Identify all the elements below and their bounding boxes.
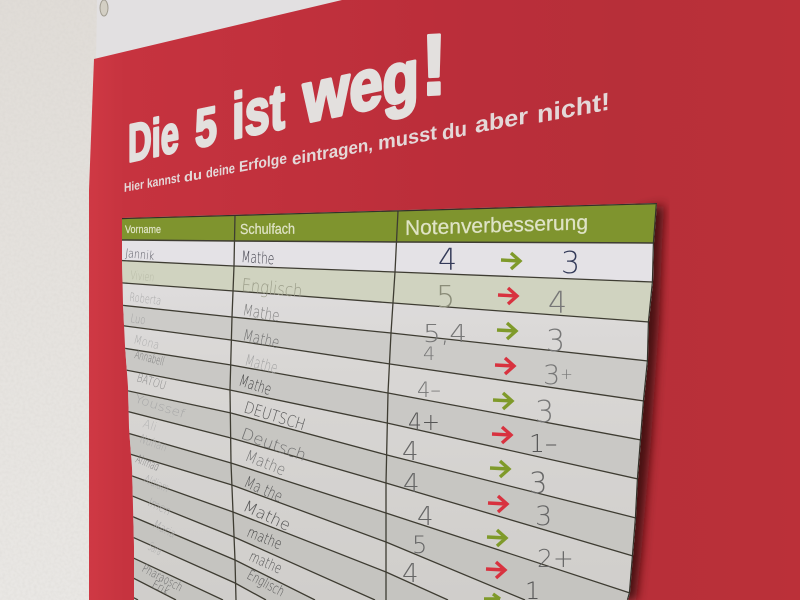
backing paper: [94, 0, 345, 62]
old grades: 4+: [408, 408, 440, 436]
pin: [100, 0, 108, 16]
first row highlight: [374, 247, 654, 281]
header labels: [125, 211, 588, 240]
handwritten names: [125, 246, 188, 598]
handwritten subjects: [237, 247, 309, 600]
handwritten names: Imen: [146, 495, 173, 518]
handwritten subjects: Englisch: [240, 275, 303, 302]
old grades: 4: [417, 502, 434, 532]
improvement arrows: [484, 253, 520, 599]
handwritten subjects: Mathe: [241, 300, 281, 325]
table header band: [120, 203, 660, 243]
subtitle: du: [184, 167, 202, 185]
new grades: 1–: [529, 429, 557, 458]
old grades: 5,4: [423, 319, 467, 348]
handwritten names: BATOU: [135, 370, 168, 393]
handwritten subjects: Mathe: [243, 351, 280, 377]
old grades: [402, 243, 467, 589]
old grades: 4: [402, 437, 419, 467]
subtitle: kannst: [147, 170, 180, 191]
subtitle: [124, 88, 610, 195]
handwritten subjects: Mathe: [240, 496, 294, 535]
new grades: [525, 246, 580, 600]
handwritten names: Erik: [150, 577, 172, 598]
handwritten names: Annabell: [133, 347, 166, 369]
subtitle: du: [442, 118, 467, 145]
handwritten names: Sara: [146, 539, 165, 558]
old grades: 5: [412, 531, 427, 559]
subtitle: eintragen,: [292, 134, 373, 169]
row lines: [110, 211, 680, 600]
handwritten subjects: DEUTSCH: [242, 398, 308, 434]
old grades: 4: [403, 469, 420, 499]
new grades: 3: [535, 501, 552, 532]
handwritten names: Aldiam: [142, 472, 171, 495]
handwritten names: Nuhan: [138, 432, 169, 454]
title: !: [421, 17, 447, 114]
title: weg: [302, 34, 419, 139]
table outline: [122, 203, 657, 600]
row stripes: [110, 260, 680, 600]
handwritten names: Vivien: [130, 268, 155, 284]
handwritten names: Luo: [130, 311, 147, 327]
title: Die: [128, 104, 179, 174]
subtitle: Erfolge: [239, 150, 287, 176]
new grades: 4: [548, 286, 567, 321]
handwritten names: Ahmad: [134, 452, 161, 474]
handwritten subjects: Mathe: [237, 371, 274, 399]
old grades: 4–: [417, 378, 441, 402]
header labels: Notenverbesserung: [405, 211, 588, 240]
handwritten subjects: mathe: [245, 523, 285, 553]
new grades: 3: [543, 360, 560, 391]
subtitle: aber: [475, 102, 528, 138]
old grades: 4: [402, 559, 419, 589]
new grades: +: [560, 365, 573, 383]
handwritten subjects: Mathe: [243, 446, 289, 479]
title: 5: [195, 95, 217, 160]
handwritten subjects: Ma the: [241, 472, 286, 506]
old grades: 4: [423, 343, 435, 365]
handwritten subjects: Mathe: [241, 325, 281, 352]
handwritten names: Mona: [132, 332, 161, 352]
old grades: 5: [436, 280, 455, 315]
handwritten names: Ali: [141, 417, 159, 434]
wall texture: [0, 0, 100, 600]
handwritten names: Roberta: [129, 290, 162, 308]
header labels: Schulfach: [240, 222, 295, 238]
subtitle: Hier: [124, 177, 144, 195]
table shadow: [610, 205, 664, 600]
old grades: 4: [438, 243, 457, 278]
subtitle: deine: [206, 160, 235, 181]
subtitle: nicht!: [537, 88, 610, 129]
table: [100, 200, 680, 600]
new grades: 3: [561, 246, 580, 281]
header labels: Vorname: [125, 224, 161, 236]
new grades: 3: [546, 324, 565, 359]
new grades: 3: [535, 395, 554, 430]
handwritten subjects: Mathe: [241, 247, 275, 268]
new grades: 3: [529, 466, 547, 500]
handwritten names: Maria: [151, 517, 178, 541]
handwritten subjects: Deutsch: [239, 424, 309, 465]
new grades: 2+: [537, 544, 574, 573]
title: [128, 17, 447, 174]
handwritten names: Youssef: [133, 392, 188, 421]
subtitle: musst: [378, 122, 437, 155]
handwritten names: Jannik: [125, 246, 155, 263]
handwritten subjects: mathe: [246, 547, 285, 577]
title: ist: [232, 69, 285, 153]
